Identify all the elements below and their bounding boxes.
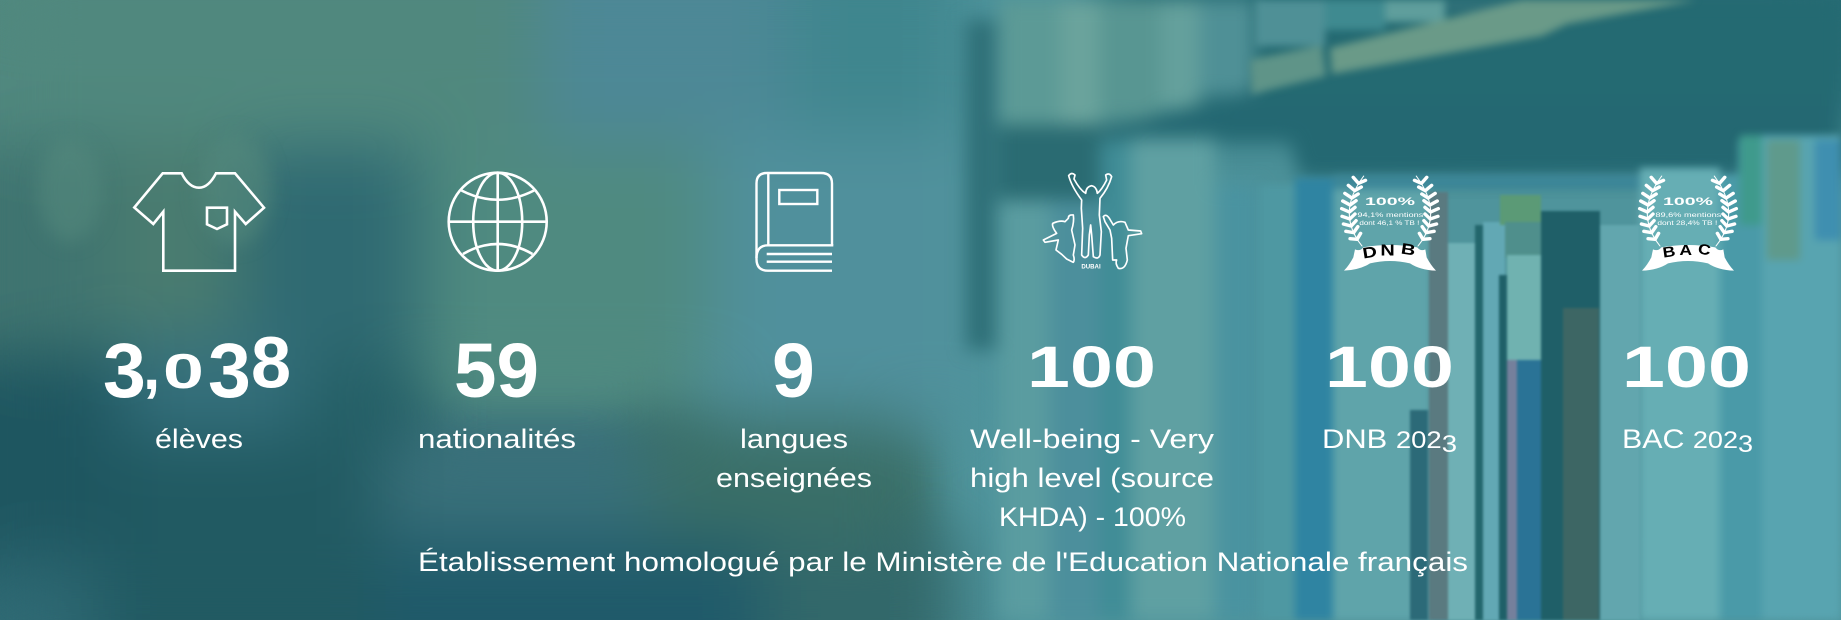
icon: jumping figures with Dubai mark: DUBAI (1081, 264, 1101, 271)
number: 100: 0 (1070, 335, 1113, 400)
ribbon lettering: C (1697, 241, 1712, 259)
ribbon lettering (1662, 241, 1712, 261)
label: BAC 2023: 3 (1738, 431, 1753, 458)
number: 3,038: 3 (208, 328, 251, 414)
number: 100: 0 (1113, 335, 1156, 400)
ribbon lettering (1361, 240, 1417, 262)
stat: 100 BAC 2023 (1622, 176, 1753, 458)
icon: t-shirt (134, 173, 264, 271)
number: 100: 0 (1665, 335, 1708, 400)
laurel wreath left (1640, 176, 1663, 246)
icon: jumping figures with Dubai mark (1043, 173, 1142, 271)
number: 100 (1027, 335, 1156, 400)
ribbon lettering: B (1400, 240, 1417, 259)
number: 3,038 (103, 324, 291, 414)
icon: BAC laurel badge (1640, 176, 1736, 271)
number: 100 (1325, 335, 1454, 400)
icon: DNB laurel badge: 94,1% mentions (1357, 212, 1424, 219)
ribbon lettering: B (1662, 243, 1676, 261)
number: 100: 1 (1622, 335, 1665, 400)
ribbon (1642, 245, 1734, 271)
number: 100: 0 (1368, 335, 1411, 400)
number: 3,038: , (143, 334, 160, 403)
label: langues enseignées: enseignées (716, 463, 872, 493)
number: 100 (1622, 335, 1751, 400)
icon: book (756, 173, 833, 271)
icon: globe (449, 173, 547, 271)
number: 59: 59 (454, 328, 539, 414)
icon: DNB laurel badge: dont 46,1 % TB ! (1359, 221, 1420, 227)
number: 9: 9 (772, 328, 815, 414)
number: 3,038: 3 (103, 328, 146, 414)
stat: 9 langues enseignées (716, 173, 872, 493)
ribbon lettering: N (1380, 242, 1395, 259)
label: nationalités: nationalités (418, 424, 576, 454)
label: DNB 2023: 3 (1442, 431, 1457, 458)
label: well-being text (970, 424, 1215, 532)
footer note: Établissement homologué par le Ministère de l'Education Nationale français (418, 547, 1468, 577)
stat: 59 nationalités (418, 173, 576, 454)
number: 100: 1 (1027, 335, 1070, 400)
number: 100: 1 (1325, 335, 1368, 400)
label: well-being text: high level (source (970, 463, 1214, 493)
laurel wreath right (1414, 176, 1438, 246)
label: langues enseignées (716, 424, 872, 493)
label: well-being text: Well-being - Very (970, 424, 1215, 454)
ribbon (1344, 245, 1436, 271)
stat: 100 DNB 2023 (1322, 176, 1457, 458)
icon: BAC laurel badge: 89,6% mentions (1655, 212, 1722, 219)
stat: 100 well-being (970, 173, 1215, 532)
number: 100: 0 (1708, 335, 1751, 400)
number: 3,038: 0 (163, 344, 204, 399)
stat: 3,038 élèves (103, 173, 291, 454)
icon: DNB laurel badge (1342, 176, 1438, 271)
icon: DNB laurel badge: 100% (1365, 196, 1415, 208)
label: well-being text: KHDA) - 100% (999, 502, 1186, 532)
laurel wreath right (1712, 176, 1736, 246)
number: 3,038: 8 (251, 324, 291, 404)
label: BAC 2023: BAC 202 (1622, 424, 1733, 454)
label: élèves: élèves (155, 424, 243, 454)
icon: BAC laurel badge: 100% (1663, 196, 1713, 208)
label: DNB 2023: DNB 202 (1322, 424, 1436, 454)
label: langues enseignées: langues (740, 424, 848, 454)
laurel wreath left (1342, 176, 1365, 246)
ribbon lettering: A (1679, 242, 1692, 259)
number: 100: 0 (1411, 335, 1454, 400)
icon: BAC laurel badge: dont 28,4% TB ! (1657, 221, 1718, 227)
ribbon lettering: D (1361, 243, 1378, 262)
